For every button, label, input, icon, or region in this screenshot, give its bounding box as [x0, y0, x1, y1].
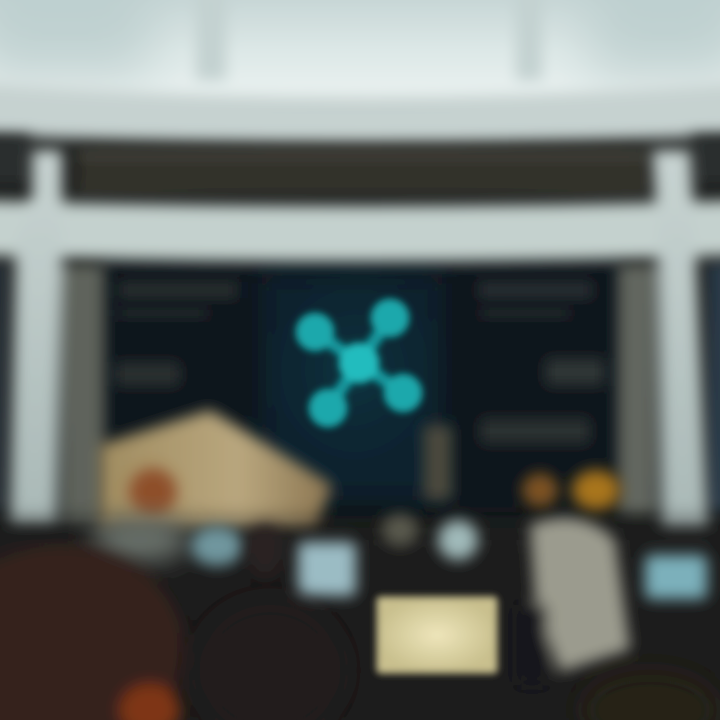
monitor: centre-left screen [298, 542, 356, 596]
foreground head, bottom left [0, 524, 283, 720]
monitor: centre screen [438, 520, 478, 560]
bright laptop screen [377, 597, 497, 673]
audience heads centre [382, 514, 418, 546]
white horizontal beam [0, 200, 720, 262]
left audience light patch [90, 518, 190, 562]
beige tent structure [100, 410, 332, 535]
foreground head, bottom centre [195, 600, 345, 720]
icon: teal network logo [296, 299, 422, 427]
crowd at the bottom [0, 518, 720, 720]
monitor: right screen [645, 555, 707, 599]
foreground head, bottom right [580, 670, 720, 720]
attendee in white shirt [517, 518, 630, 685]
curved white fascia band [0, 82, 720, 142]
dark upper window strip [0, 135, 720, 192]
stage speaker silhouette [424, 425, 452, 500]
ceiling [0, 0, 720, 110]
attendees with amber hair [522, 470, 620, 510]
monitor: left screen [191, 526, 243, 566]
left pillars [10, 150, 104, 525]
dark side walls [0, 262, 720, 512]
dark presentation screen [100, 260, 625, 512]
right pillars [618, 150, 708, 530]
